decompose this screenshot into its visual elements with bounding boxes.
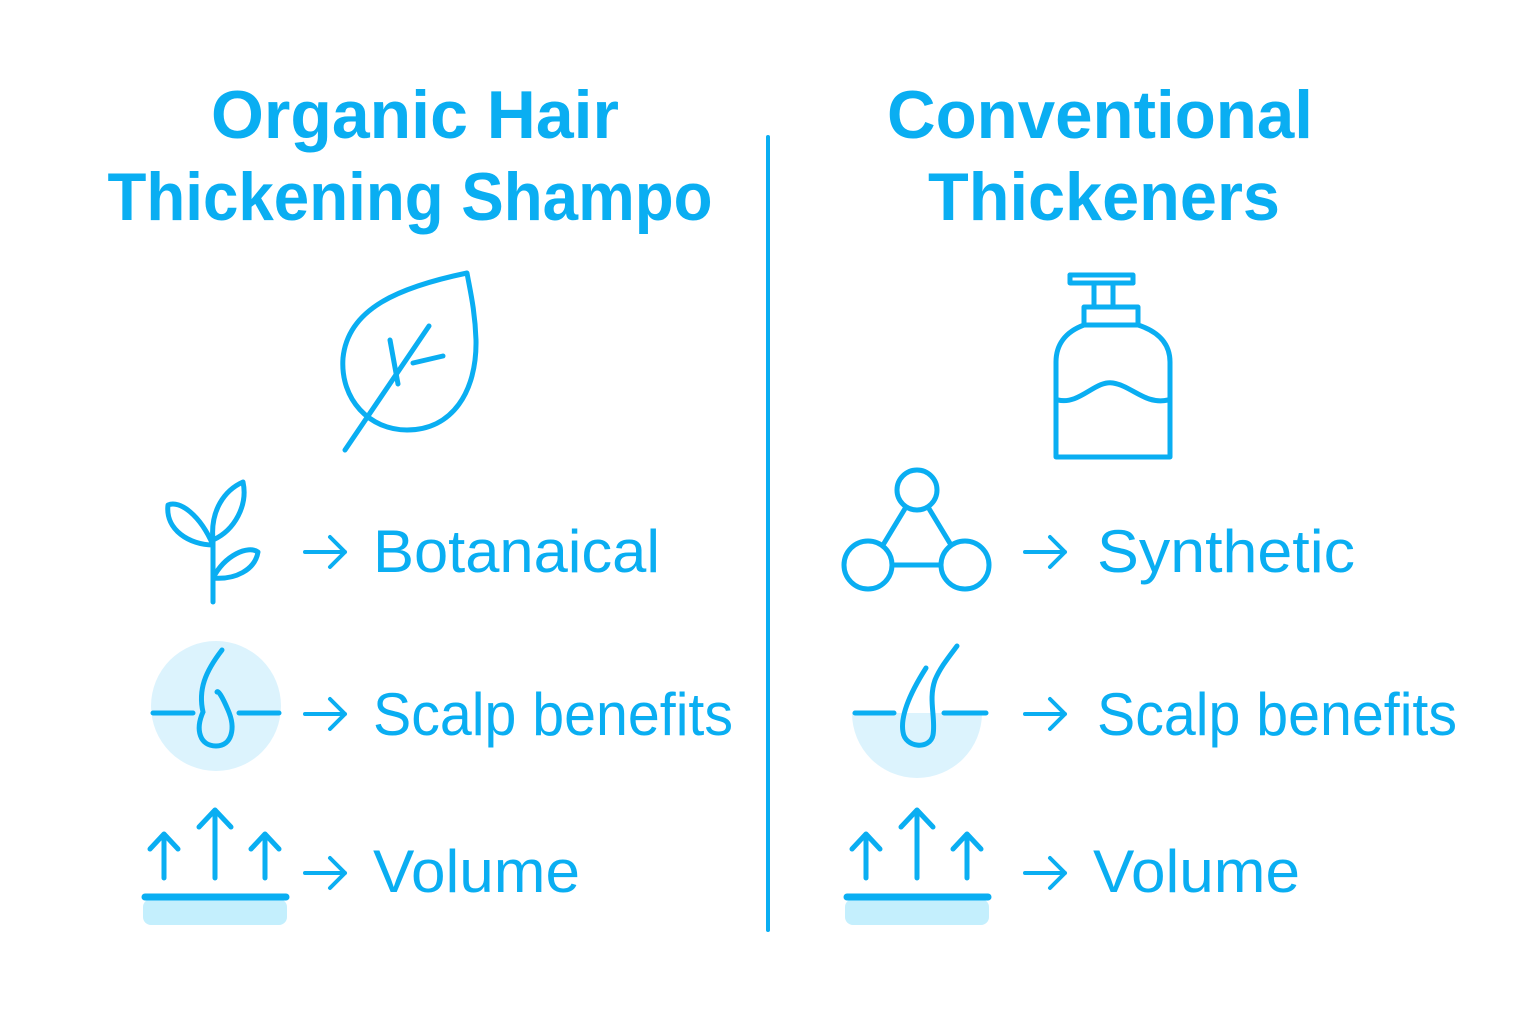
icon: scalp left [151,641,281,771]
title: organic: Organic Hair [211,77,619,153]
icon: bottle [1056,275,1170,457]
arrow + label: volume right: Volume [1093,838,1300,905]
icon: sprout [168,482,258,602]
icon: volume right [845,810,989,925]
arrow + label: botanaical: Botanaical [373,518,660,585]
icon: leaf [343,273,476,450]
arrow + label: scalp left: Scalp benefits [373,681,733,748]
arrow + label: scalp right: Scalp benefits [1097,681,1457,748]
arrow + label: volume left: Volume [373,838,580,905]
divider [766,137,770,930]
title: conventional: Thickeners [928,159,1280,235]
icon: scalp right [852,646,986,778]
icon: molecule [844,470,989,589]
title: organic: Thickening Shampo [108,159,712,235]
title: conventional [887,77,1313,235]
icon: volume left [143,810,287,925]
arrow + label: synthetic: Synthetic [1097,518,1355,585]
title: conventional: Conventional [887,77,1313,153]
title: organic [108,77,712,235]
